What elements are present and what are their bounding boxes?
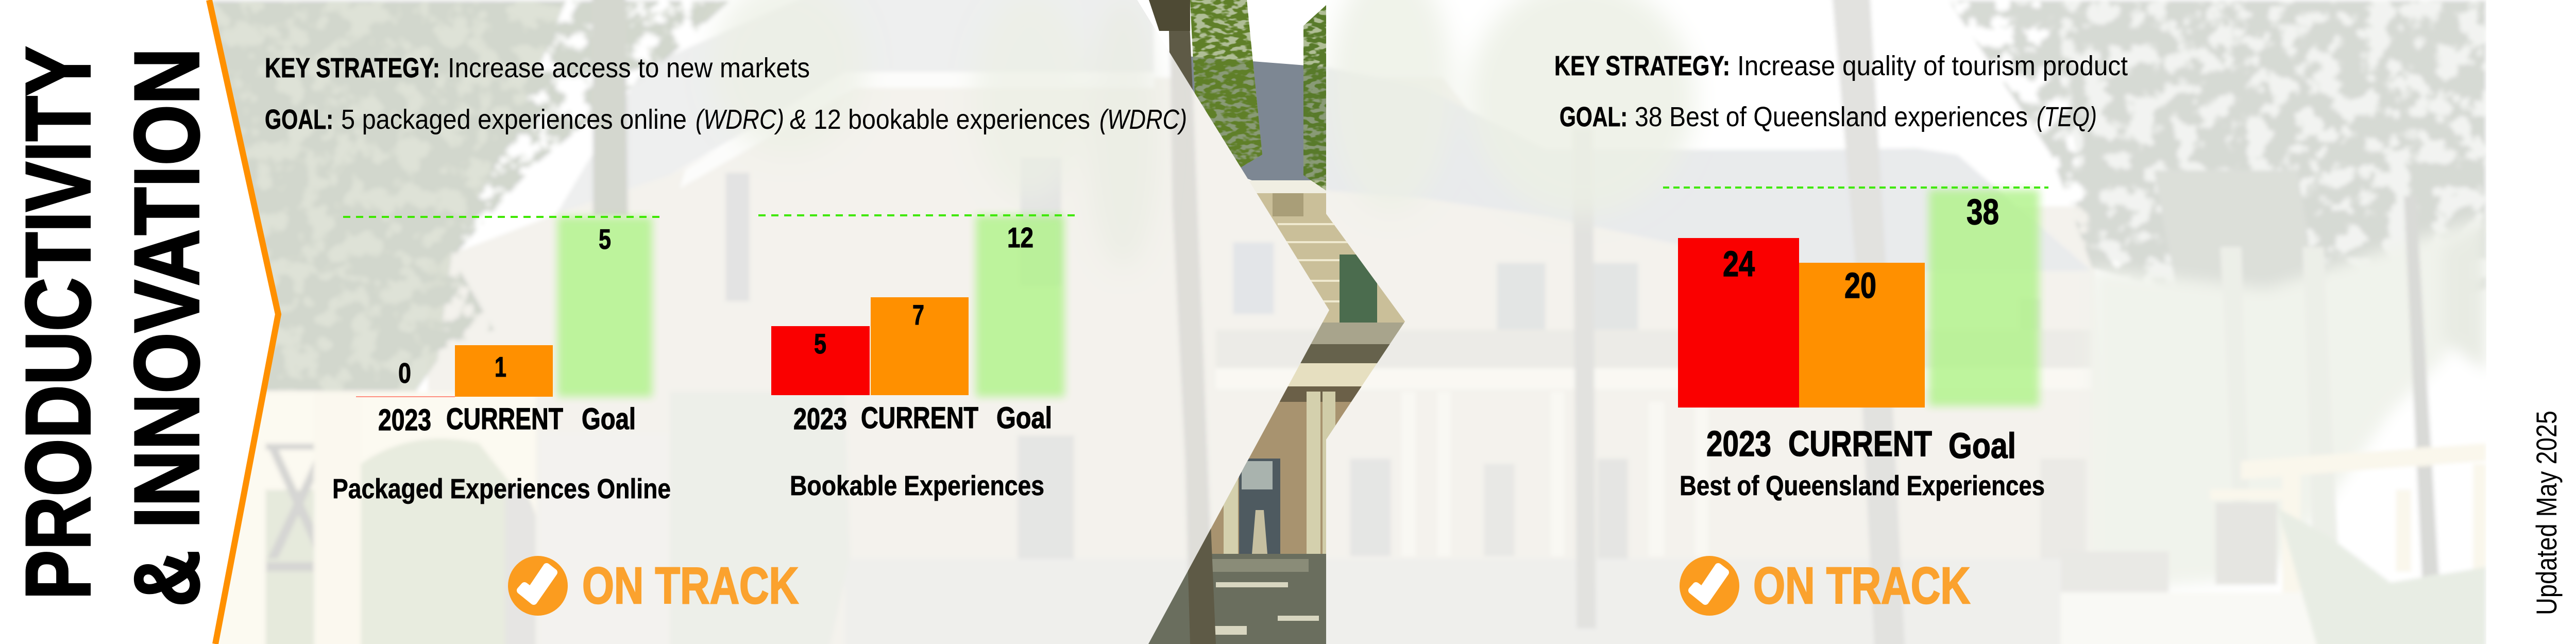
- columns: [1401, 392, 1708, 556]
- bar chart: packaged experiences online: 2023: [378, 403, 431, 437]
- right canopy: [2050, 0, 2486, 309]
- bar chart: best of queensland experiences: 24: [1723, 244, 1755, 284]
- bar chart: bookable experiences: [758, 215, 1075, 501]
- ledge: [1180, 323, 1412, 344]
- bar chart: packaged experiences online: CURRENT: [446, 402, 563, 436]
- text block: strategy and goal, left: KEY STRATEGY:: [265, 53, 440, 83]
- windows: [725, 173, 750, 301]
- text block: strategy and goal, right: GOAL:: [1560, 101, 1628, 132]
- left pergola and bushes: [206, 392, 536, 644]
- bar chart: packaged experiences online: Packaged Experiences Online: [332, 473, 671, 504]
- arch wall bottom: [538, 433, 672, 644]
- bar chart: packaged experiences online: 0: [398, 357, 411, 389]
- slate roof: [1180, 56, 1412, 198]
- bar chart: best of queensland experiences: 2023: [1706, 423, 1771, 464]
- palm fronds: [1190, 0, 1262, 170]
- status: on track, left: ON TRACK: [582, 557, 799, 615]
- bar chart: best of queensland experiences: Goal: [1948, 426, 2016, 466]
- status: on track, left: [508, 556, 799, 616]
- white veil: right: [1326, 0, 2486, 644]
- bar chart: bookable experiences: 5: [814, 328, 826, 360]
- columns: [1307, 392, 1320, 556]
- text block: strategy and goal, left: 12 bookable experiences: [814, 104, 1090, 135]
- bar chart: packaged experiences online: 5: [599, 223, 611, 255]
- text block: strategy and goal, left: (WDRC): [1099, 104, 1187, 135]
- bar chart: bookable experiences: Goal: [996, 401, 1052, 435]
- status: on track, right: [1680, 556, 1970, 616]
- bar chart: best of queensland experiences: 38: [1967, 192, 1999, 232]
- right lower trees: [2092, 216, 2486, 592]
- text block: strategy and goal, right: Increase quality of tourism product: [1737, 50, 2128, 81]
- bar chart: bookable experiences: 7: [912, 299, 924, 331]
- text block: strategy and goal, left: Increase access to new markets: [448, 53, 810, 83]
- text block: strategy and goal, left: GOAL:: [265, 104, 333, 135]
- bar chart: best of queensland experiences: [1663, 188, 2048, 501]
- right pergola and ground: [2061, 592, 2486, 644]
- shutters: [1340, 255, 1377, 323]
- text block: strategy and goal, left: (WDRC): [696, 104, 784, 135]
- trunks: [1168, 50, 1211, 571]
- bar chart: best of queensland experiences: Best of Queensland Experiences: [1680, 470, 2045, 501]
- left canopy: [206, 0, 567, 412]
- white veil: left: [206, 0, 1329, 644]
- wall: [428, 77, 2117, 644]
- roofs: [556, 0, 1154, 214]
- stone wall: [1180, 193, 1412, 332]
- text block: strategy and goal, left: [265, 53, 1187, 135]
- text block: strategy and goal, right: 38 Best of Queensland experiences: [1635, 101, 2028, 132]
- lower band: [1021, 561, 1071, 579]
- bar chart: bookable experiences: Bookable Experiences: [790, 470, 1044, 501]
- status: on track, right: ON TRACK: [1753, 557, 1970, 615]
- panel: title chevron: [0, 0, 278, 644]
- lower stone: [1144, 402, 1412, 556]
- bar chart: bookable experiences: 2023: [793, 402, 847, 436]
- bar chart: packaged experiences online: 1: [495, 351, 506, 383]
- fountain: [1144, 554, 1329, 644]
- trunk: [1168, 0, 1216, 644]
- text block: strategy and goal, right: (TEQ): [2037, 101, 2097, 132]
- updated date: Updated May 2025: [2530, 411, 2563, 615]
- bar chart: best of queensland experiences: 20: [1844, 265, 1876, 306]
- bar chart: packaged experiences online: [332, 217, 671, 504]
- text block: strategy and goal, left: 5 packaged experiences online: [341, 104, 687, 135]
- text block: strategy and goal, left: &: [790, 104, 807, 135]
- title: [7, 46, 218, 607]
- bar chart: bookable experiences: CURRENT: [861, 401, 978, 435]
- bar chart: best of queensland experiences: CURRENT: [1788, 423, 1932, 464]
- text block: strategy and goal, right: KEY STRATEGY:: [1554, 50, 1730, 81]
- pale fronds: [716, 0, 1698, 208]
- bar chart: packaged experiences online: Goal: [582, 402, 636, 436]
- photo: clear chevron window: [1133, 0, 1412, 644]
- bar chart: bookable experiences: 12: [1007, 222, 1033, 253]
- text block: strategy and goal, right: [1554, 50, 2128, 132]
